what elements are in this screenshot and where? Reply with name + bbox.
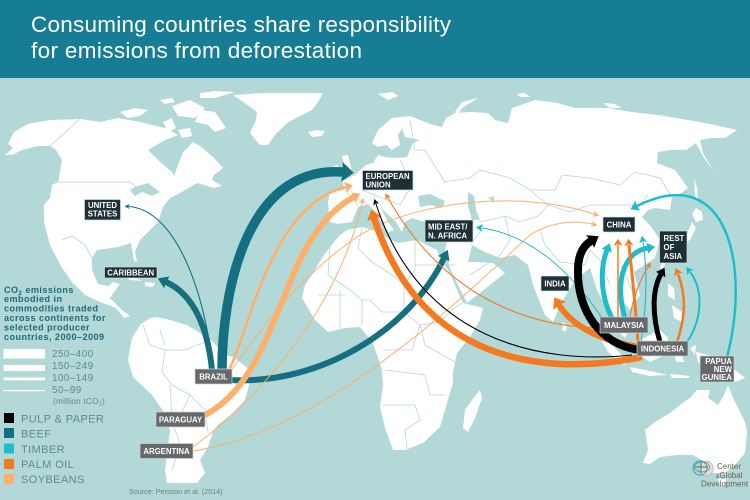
world map — [5, 91, 747, 486]
legend heading: commodities traded — [4, 304, 99, 314]
label: Brazil — [195, 369, 232, 384]
label: Papua New Guinea: PAPUA — [705, 357, 732, 366]
label: Paraguay: PARAGUAY — [159, 416, 203, 424]
commodity colour key: TIMBER — [21, 444, 65, 456]
line width scale: 2 — [99, 402, 102, 408]
label: India — [541, 276, 569, 291]
flow: Indonesia to European Union, pulp and paper — [376, 204, 632, 357]
flow arrows — [129, 172, 736, 451]
legend heading: CO — [4, 285, 19, 295]
Africa — [302, 227, 483, 450]
logo: Center for Global Development: Center — [717, 462, 741, 471]
header banner — [0, 0, 750, 78]
Greenland — [233, 93, 323, 145]
flow: Indonesia to Rest of Asia, pulp and paper — [654, 274, 661, 342]
line width scale: 100–149 — [52, 373, 94, 384]
Taiwan and Philippines — [660, 262, 682, 322]
legend heading: countries, 2000–2009 — [4, 332, 105, 342]
label: Argentina — [140, 444, 193, 458]
label: Malaysia — [600, 317, 648, 333]
inland water — [130, 183, 494, 220]
flow: Brazil to Caribbean, beef — [166, 282, 212, 370]
logo: Center for Global Development: &Global — [716, 471, 743, 480]
Eurasia — [328, 100, 737, 338]
flow: Brazil to United States, beef — [129, 206, 213, 370]
legend — [4, 285, 106, 486]
logo: Center for Global Development — [693, 461, 749, 488]
source note: Source: Persson et al. (2014) — [129, 487, 222, 496]
flow: Malaysia to Middle East, timber — [482, 228, 602, 318]
commodity colour key: PULP & PAPER — [21, 414, 104, 426]
flow: Malaysia to China, timber — [602, 250, 612, 318]
Sri Lanka — [562, 322, 567, 332]
flow: Indonesia to China, pulp and paper — [578, 241, 640, 350]
South America — [128, 317, 250, 483]
Borneo — [640, 330, 668, 362]
label: Rest of Asia: ASIA — [664, 252, 682, 261]
label: Paraguay — [156, 412, 205, 427]
flow: Papua New Guinea to China, timber — [637, 195, 736, 357]
legend heading: embodied in — [4, 294, 63, 304]
Caribbean islands — [122, 275, 155, 287]
flow: Indonesia to India, palm oil — [559, 305, 640, 347]
Britain and Ireland — [331, 155, 352, 178]
legend heading: selected producer — [4, 322, 90, 332]
flow: Brazil to China, soybeans — [230, 201, 594, 372]
Sakhalin and Kuriles — [694, 178, 698, 200]
label: Malaysia: MALAYSIA — [604, 321, 644, 330]
label: Caribbean: CARIBBEAN — [107, 268, 154, 278]
Iceland — [308, 130, 325, 137]
flow: Indonesia to China, palm oil — [629, 245, 638, 342]
legend heading: across continents for — [4, 313, 106, 323]
label: Middle East / North Africa: N. AFRICA — [428, 232, 467, 240]
line width scale: 50–99 — [52, 385, 82, 396]
label: Rest of Asia — [660, 231, 687, 263]
label: Middle East / North Africa — [425, 220, 473, 242]
label: United States — [84, 200, 120, 220]
flow: Indonesia to China, timber — [641, 242, 646, 342]
label: Brazil: BRAZIL — [199, 372, 228, 382]
label: Indonesia — [637, 341, 688, 356]
label: India: INDIA — [544, 280, 566, 288]
Australia — [643, 385, 747, 473]
Arctic islands — [120, 91, 235, 138]
flow: Brazil to Middle East, beef — [230, 258, 444, 380]
label: China — [603, 217, 635, 232]
legend heading — [4, 285, 106, 342]
Japan — [672, 208, 703, 248]
label: European Union: UNION — [366, 180, 391, 190]
commodity colour key — [4, 413, 104, 486]
label: Rest of Asia: OF — [664, 243, 675, 252]
label: Papua New Guinea — [700, 356, 734, 382]
label: Middle East / North Africa: MID EAST/ — [428, 222, 468, 232]
Sulawesi and Moluccas — [672, 340, 696, 362]
title: Consuming countries share responsibility — [31, 12, 452, 37]
Madagascar — [463, 390, 482, 432]
flow: Argentina to China, soybeans — [193, 222, 592, 451]
title — [31, 12, 452, 63]
label: Indonesia: INDONESIA — [641, 344, 685, 354]
label: China: CHINA — [607, 220, 632, 230]
destination and producer labels — [84, 170, 734, 458]
label: Rest of Asia: REST — [664, 234, 685, 243]
legend heading: emissions — [22, 285, 74, 295]
flow: Indonesia to European Union, palm oil — [374, 218, 642, 364]
New Guinea — [696, 352, 745, 382]
logo: Center for Global Development: Development — [701, 480, 749, 488]
Tasmania — [718, 479, 726, 486]
label: Argentina: ARGENTINA — [143, 447, 190, 456]
title: for emissions from deforestation — [31, 38, 362, 63]
flow: Malaysia to Rest of Asia, palm oil — [630, 267, 648, 318]
flow: Malaysia to European Union, palm oil — [388, 198, 605, 328]
line width scale: (million tCO — [53, 396, 99, 406]
line width scale: 150–249 — [52, 361, 94, 372]
label: European Union — [362, 170, 413, 190]
line width scale — [4, 349, 105, 408]
label: European Union: EUROPEAN — [366, 172, 410, 181]
Sumatra — [600, 338, 628, 365]
line width scale: ) — [102, 396, 105, 406]
country borders — [50, 119, 672, 470]
flow: Malaysia to China, palm oil — [617, 245, 619, 318]
flow: Indonesia to Rest of Asia, timber — [687, 272, 699, 342]
legend heading: 2 — [19, 291, 23, 297]
flow: Indonesia to Rest of Asia, palm oil — [677, 274, 684, 342]
North America — [5, 118, 223, 318]
label: United States: UNITED — [88, 201, 117, 210]
label: United States: STATES — [88, 210, 117, 218]
flow: Argentina to European Union, soybeans — [193, 203, 362, 447]
Svalbard and Novaya Zemlya — [378, 92, 622, 114]
flow: Paraguay to European Union, soybeans — [203, 197, 354, 416]
commodity colour key: PALM OIL — [21, 459, 74, 471]
Java and Lesser Sundas — [630, 367, 690, 378]
line width scale: 250–400 — [52, 349, 94, 360]
commodity colour key: BEEF — [21, 428, 51, 440]
label: Papua New Guinea: GUNIEA — [702, 373, 732, 382]
flow: Malaysia to Rest of Asia, timber — [621, 248, 648, 318]
commodity colour key: SOYBEANS — [21, 474, 85, 486]
flow: Brazil to European Union, soybeans — [228, 187, 346, 372]
flow: Brazil to European Union, beef — [222, 172, 343, 370]
label: Papua New Guinea: NEW — [714, 365, 733, 374]
